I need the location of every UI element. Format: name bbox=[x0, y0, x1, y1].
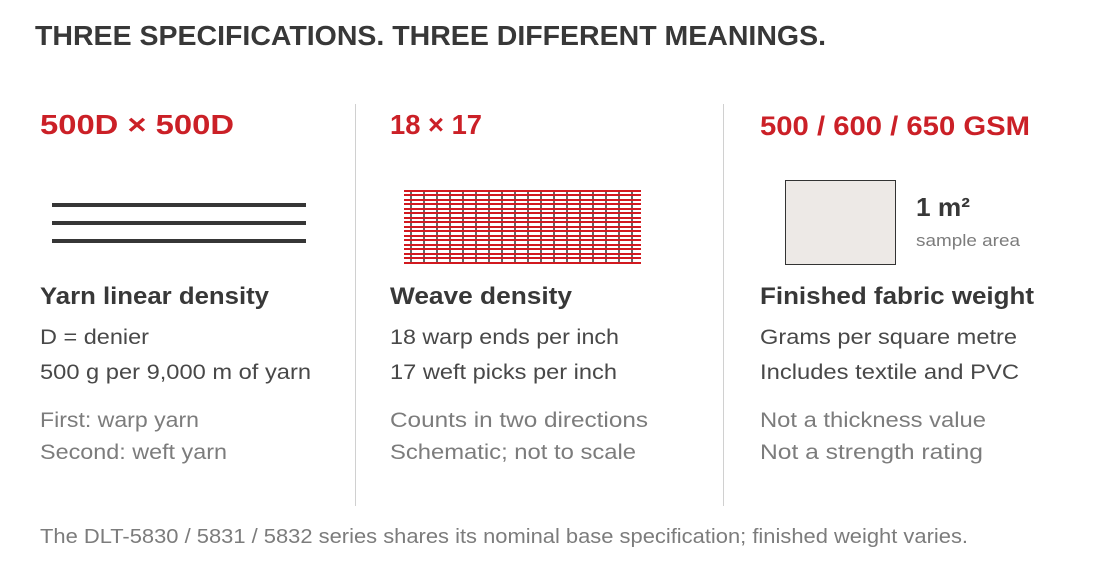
definition text bbox=[40, 325, 311, 384]
spec heading: 500D x 500D: 500D × 500D bbox=[40, 109, 234, 140]
spec heading: 18 x 17: 18 × 17 bbox=[390, 109, 482, 140]
panel: yarn linear density bbox=[40, 109, 311, 464]
subheading: finished fabric weight: Finished fabric weight bbox=[760, 283, 1034, 310]
definition text: 17 weft picks per inch bbox=[390, 360, 617, 384]
note text: Second: weft yarn bbox=[40, 440, 227, 464]
footnote: The DLT-5830 / 5831 / 5832 series shares its nominal base specification; finished weight varies. bbox=[40, 525, 968, 548]
definition text bbox=[390, 325, 619, 384]
definition text: Includes textile and PVC bbox=[760, 360, 1019, 384]
note text: Schematic; not to scale bbox=[390, 440, 636, 464]
note text: First: warp yarn bbox=[40, 408, 199, 432]
subheading: yarn linear density: Yarn linear density bbox=[40, 283, 270, 310]
note text: Counts in two directions bbox=[390, 408, 648, 432]
divider left bbox=[355, 104, 356, 506]
subheading: weave density: Weave density bbox=[390, 283, 573, 310]
divider right bbox=[723, 104, 724, 506]
icon: weave grid bbox=[404, 190, 641, 264]
note text bbox=[40, 408, 227, 464]
spec heading: GSM values: 500 / 600 / 650 GSM bbox=[760, 111, 1030, 141]
note text: Not a strength rating bbox=[760, 440, 983, 464]
icon: yarn lines bbox=[52, 203, 306, 243]
definition text: 18 warp ends per inch bbox=[390, 325, 619, 349]
title: THREE SPECIFICATIONS. THREE DIFFERENT MEANINGS. bbox=[35, 20, 826, 51]
definition text bbox=[760, 325, 1019, 384]
definition text: Grams per square metre bbox=[760, 325, 1017, 349]
panel: weave density bbox=[390, 109, 648, 464]
label: sample area: sample area bbox=[916, 232, 1021, 250]
note text bbox=[390, 408, 648, 464]
note text bbox=[760, 408, 986, 464]
note text: Not a thickness value bbox=[760, 408, 986, 432]
definition text: 500 g per 9,000 m of yarn bbox=[40, 360, 311, 384]
definition text: D = denier bbox=[40, 325, 149, 349]
label: 1 m2: 1 m² bbox=[916, 192, 970, 222]
panel: finished fabric weight bbox=[760, 111, 1034, 464]
icon: sample square bbox=[786, 180, 896, 264]
